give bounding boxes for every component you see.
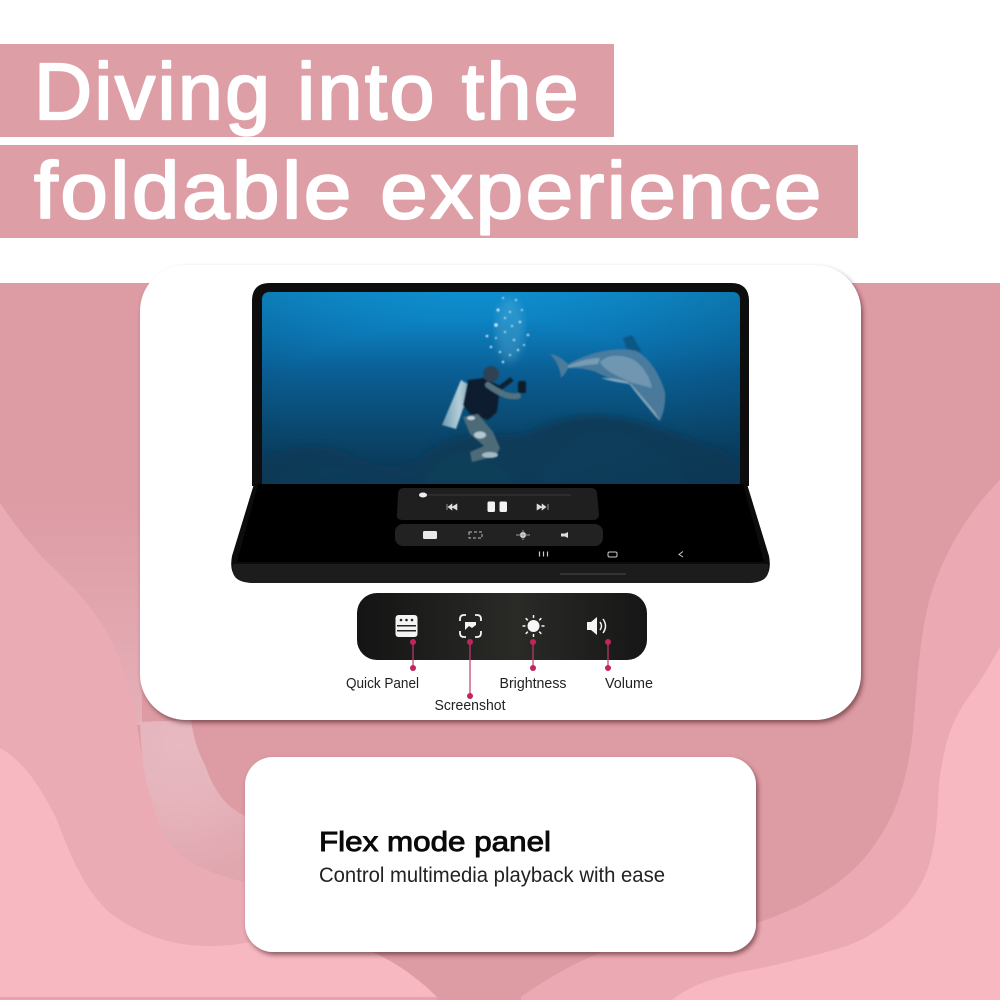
seabed rocks — [262, 416, 740, 484]
callout: quick panel — [346, 639, 419, 692]
dolphin — [550, 335, 665, 421]
foldable phone illustration — [231, 283, 770, 583]
callout: screenshot: Screenshot — [434, 697, 506, 714]
callout: volume: Volume — [605, 675, 653, 692]
callout: brightness: Brightness — [500, 675, 566, 692]
callout: volume — [605, 639, 653, 692]
title line 2: foldable experience — [34, 146, 824, 235]
card heading: Flex mode panel — [319, 826, 551, 857]
callout: screenshot — [434, 639, 506, 714]
panel: device card — [140, 265, 861, 720]
bubbles — [486, 297, 529, 363]
small flex toolbar — [395, 524, 603, 546]
card description: Control multimedia playback with ease — [319, 864, 665, 887]
callout: brightness — [500, 639, 566, 692]
diver — [442, 366, 526, 462]
media control panel — [397, 488, 599, 520]
callout: quick panel: Quick Panel — [346, 675, 419, 692]
title — [0, 44, 858, 238]
icon: volume — [587, 617, 606, 635]
icon: screenshot — [460, 615, 481, 637]
phone upper frame — [252, 283, 749, 486]
icon: brightness — [522, 615, 544, 637]
video screen: diver and dolphin — [262, 292, 740, 484]
icon: quick panel — [396, 615, 418, 637]
panel: description card — [245, 757, 756, 952]
title line 1: Diving into the — [34, 47, 581, 136]
phone lower body — [231, 484, 770, 583]
flex mode toolbar enlarged — [357, 593, 647, 660]
background: pink wave layers — [0, 283, 1000, 1000]
navigation bar icons — [540, 552, 683, 557]
